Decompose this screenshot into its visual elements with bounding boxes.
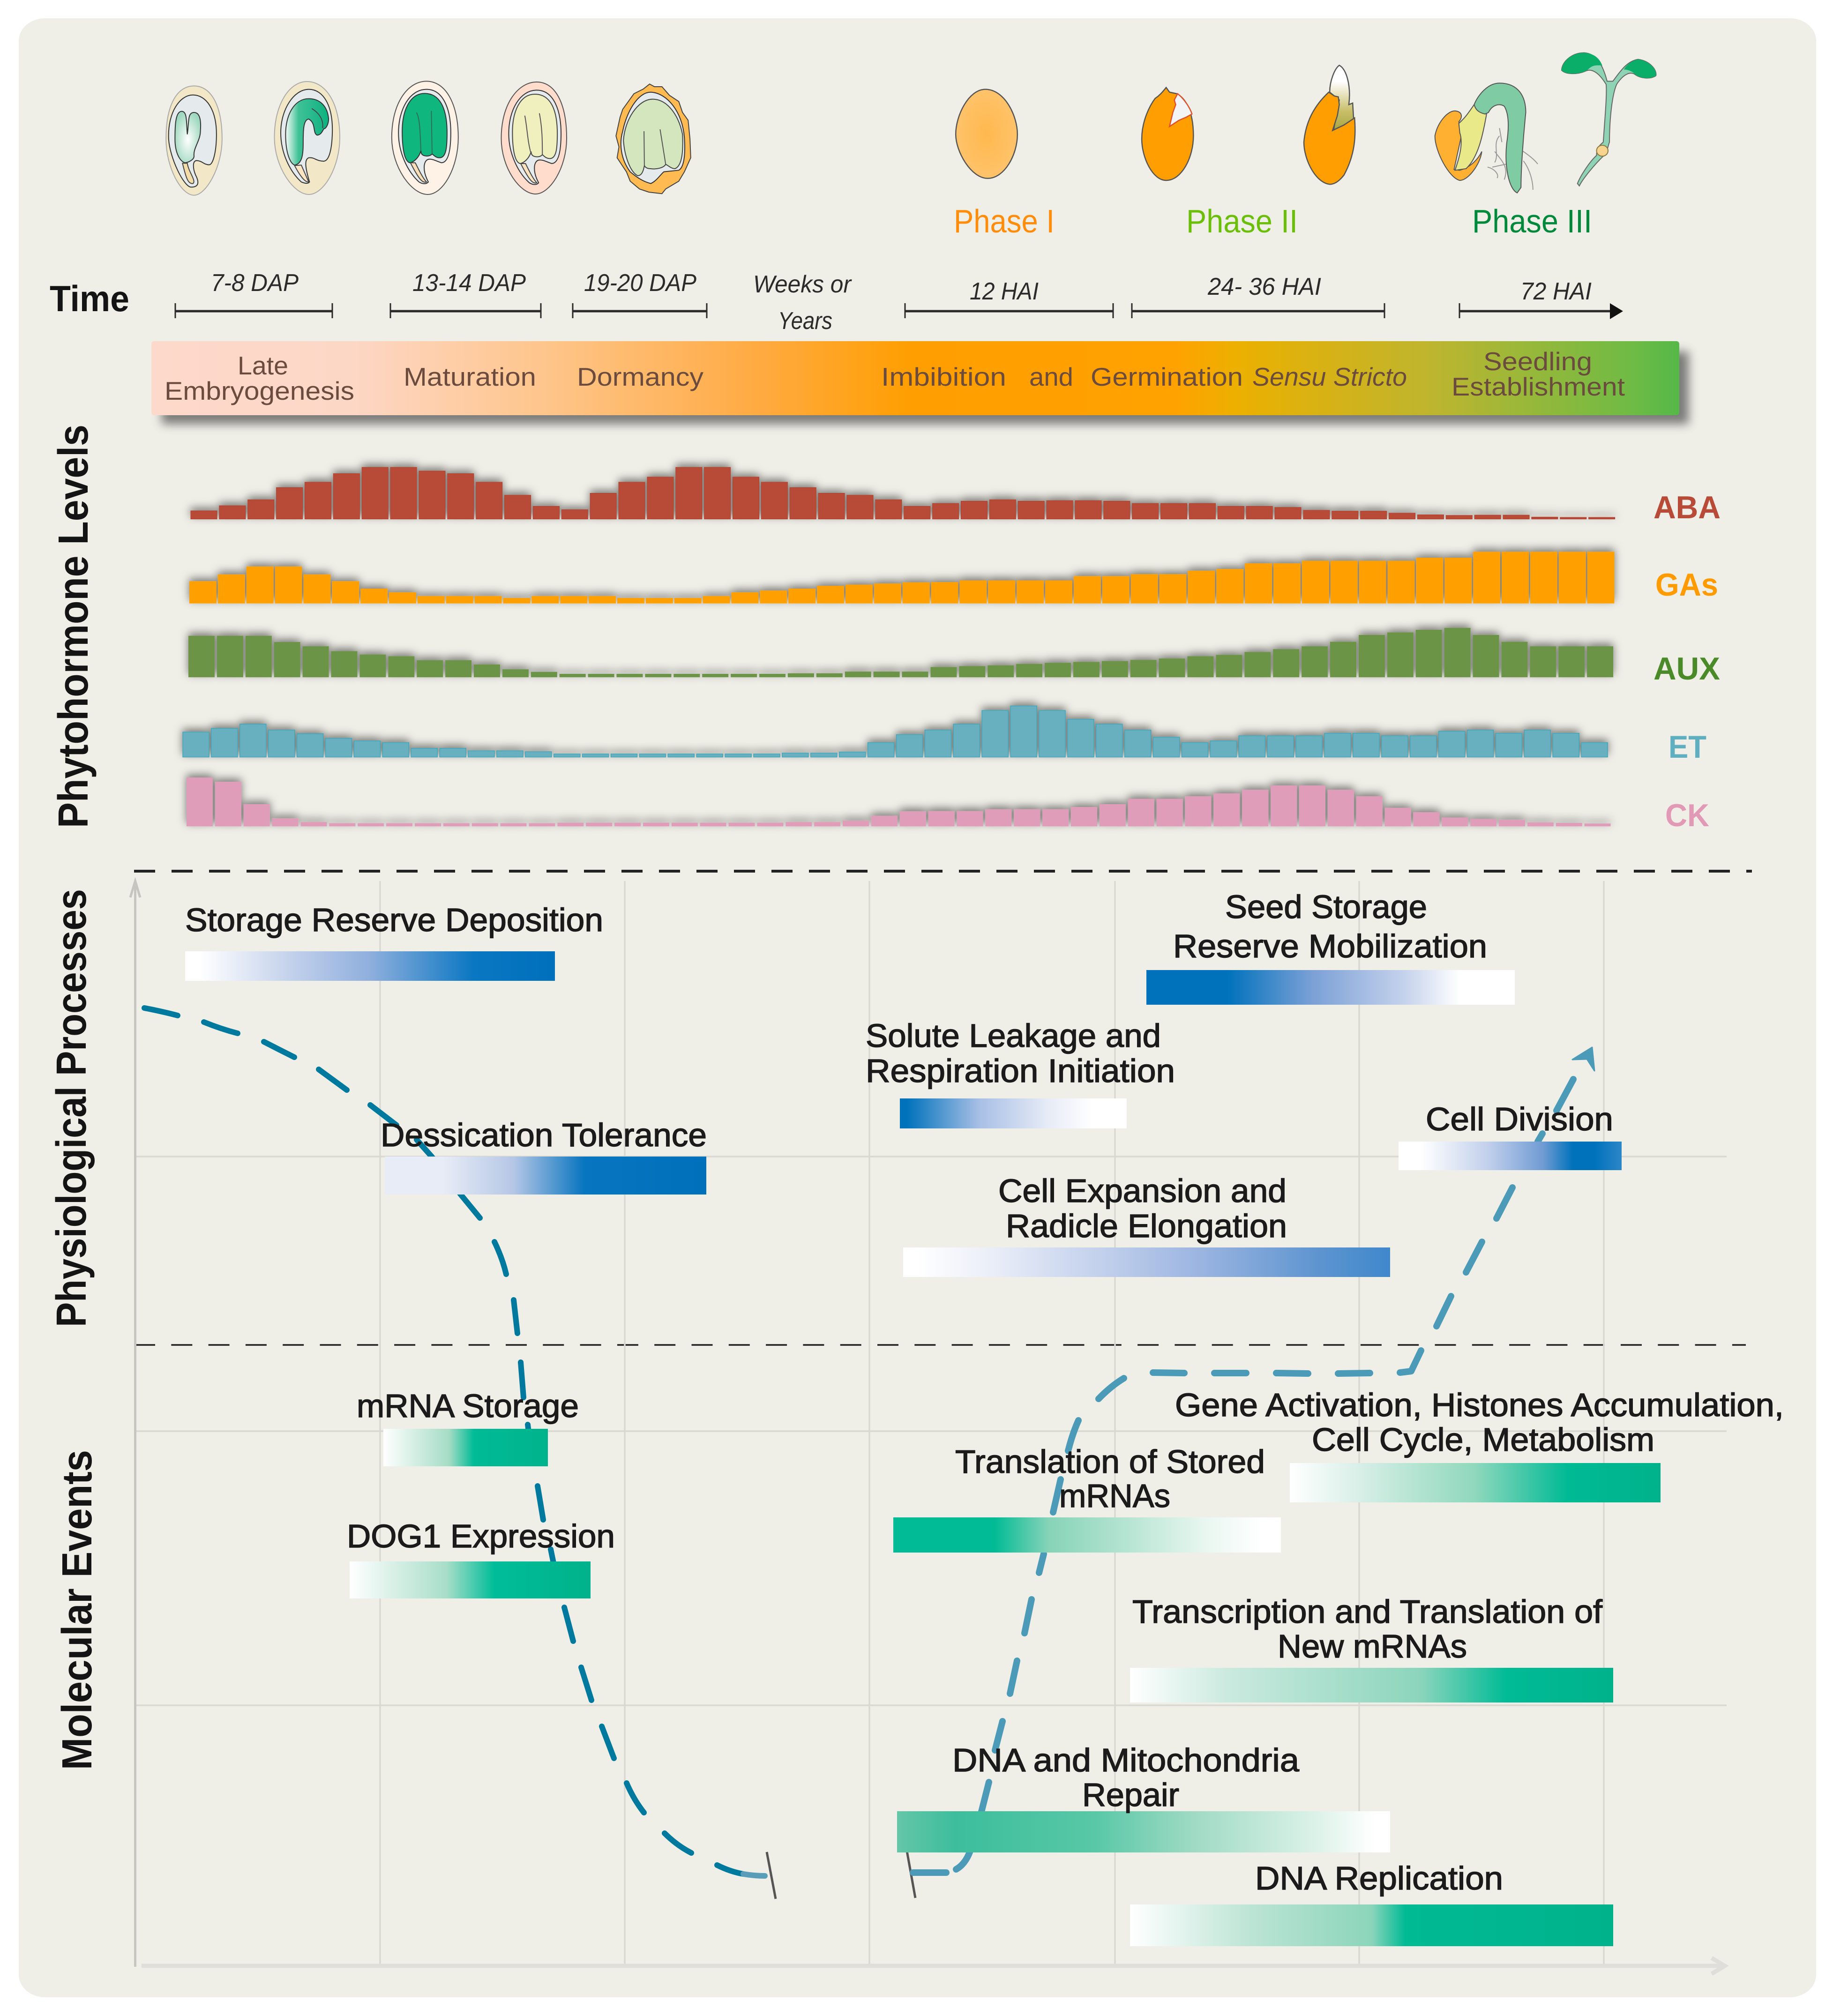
event: DNA Replication: DNA Replication	[1255, 1860, 1503, 1897]
event: DNA Replication	[1130, 1860, 1613, 1946]
icon: imbibed seed	[956, 90, 1018, 179]
time brackets	[175, 310, 1612, 312]
process: Cell Division	[1399, 1101, 1622, 1170]
curve: descending germination capacity	[144, 1008, 765, 1876]
icon: seed with emerging radicle	[1304, 65, 1355, 184]
stage labels	[165, 347, 1625, 405]
icon: seed late embryogenesis bent	[274, 82, 340, 194]
y axis arrow	[130, 881, 140, 1967]
heading: Physiological Processes: Physiological Processes	[48, 889, 95, 1327]
stage: Dormancy: Dormancy	[577, 362, 704, 391]
stage: Germination Sensu Stricto: Germination	[1091, 362, 1243, 391]
process: Seed Storage Reserve Mobilization: Seed Storage	[1225, 889, 1427, 925]
time label: 7-8 DAP: 7-8 DAP	[211, 269, 299, 297]
process: Dessication Tolerance: Dessication Tolerance	[381, 1117, 707, 1153]
bar chart: ABA	[191, 467, 1615, 519]
process: Storage Reserve Deposition	[185, 902, 603, 981]
bar chart: GAs	[189, 552, 1614, 604]
heading: Time: Time	[50, 278, 129, 319]
process: Dessication Tolerance	[381, 1117, 707, 1195]
time ranges	[175, 269, 1623, 335]
event: DNA and Mitochondria Repair	[897, 1742, 1390, 1852]
curve: ascending germination capacity	[913, 1047, 1594, 1873]
icon: seed dormancy	[501, 82, 567, 194]
legend label: ET: ET	[1668, 729, 1706, 765]
stage: Seedling Establishment: Seedling	[1483, 347, 1592, 376]
stage gradient bar	[151, 341, 1679, 415]
heading: Phytohormone Levels: Phytohormone Levels	[50, 425, 97, 828]
time label: 12 HAI: 12 HAI	[970, 278, 1039, 305]
process: Solute Leakage and Respiration Initiation: Solute Leakage and	[866, 1017, 1161, 1054]
stage bar shadow	[162, 351, 1689, 424]
legend label: CK: CK	[1665, 798, 1709, 833]
time label: 19-20 DAP: 19-20 DAP	[584, 269, 696, 297]
icon: seed late embryogenesis early	[166, 86, 222, 195]
label: Phase II: Phase II	[1186, 203, 1298, 239]
stage: and: and	[1029, 362, 1073, 391]
icon: germinated hook seedling	[1435, 83, 1538, 193]
arrowhead	[1572, 1047, 1594, 1071]
event: Translation of Stored mRNAs: Translation of Stored	[955, 1443, 1265, 1480]
process: Solute Leakage and Respiration Initiation: Respiration Initiation	[866, 1053, 1175, 1089]
event: DOG1 Expression: DOG1 Expression	[347, 1518, 615, 1554]
event: Transcription and Translation of New mRNAs	[1130, 1593, 1613, 1702]
time label: 72 HAI: 72 HAI	[1520, 278, 1592, 305]
arrow: open-ended time	[1610, 303, 1623, 319]
process: Seed Storage Reserve Mobilization	[1146, 889, 1515, 1005]
process: Storage Reserve Deposition: Storage Reserve Deposition	[185, 902, 603, 938]
stage: Late Embryogenesis: Embryogenesis	[165, 376, 354, 405]
process: Cell Expansion and Radicle Elongation	[903, 1172, 1390, 1277]
stage: Germination Sensu Stricto: Sensu Stricto	[1252, 362, 1407, 391]
axis break mark right	[907, 1851, 915, 1898]
bar chart: CK	[187, 777, 1611, 826]
process: Seed Storage Reserve Mobilization: Reserve Mobilization	[1173, 928, 1487, 964]
event: Translation of Stored mRNAs: mRNAs	[1059, 1478, 1170, 1514]
event: mRNA Storage: mRNA Storage	[357, 1388, 579, 1424]
icons: embryo development seeds	[166, 81, 691, 195]
stage: Maturation: Maturation	[404, 362, 536, 391]
event: Translation of Stored mRNAs	[893, 1443, 1281, 1553]
bar chart: AUX	[188, 628, 1613, 677]
stage: Imbibition: Imbibition	[881, 362, 1006, 391]
stage: Seedling Establishment	[1451, 347, 1625, 401]
time label: 13-14 DAP: 13-14 DAP	[412, 269, 526, 297]
stage: Late Embryogenesis: Late	[238, 351, 288, 380]
label: Phase III: Phase III	[1472, 203, 1592, 239]
stage: Germination Sensu Stricto	[1091, 362, 1407, 391]
event: Transcription and Translation of New mRNAs: Transcription and Translation of	[1132, 1593, 1603, 1630]
event: mRNA Storage	[357, 1388, 579, 1466]
process: Cell Division: Cell Division	[1426, 1101, 1613, 1137]
bracket ticks	[175, 303, 1459, 318]
icon: seed dry mature	[616, 84, 691, 194]
axes	[130, 881, 1725, 1974]
event: Gene Activation, Histones Accumulation, Cell Cycle, Metabolism: Gene Activation, Histones Accumulation,	[1175, 1387, 1784, 1423]
icon: seed maturation	[392, 81, 458, 194]
label: Phase I: Phase I	[954, 203, 1055, 239]
process: Solute Leakage and Respiration Initiation	[866, 1017, 1175, 1128]
time label: Weeks or Years: Weeks or	[753, 271, 853, 298]
stage: Seedling Establishment: Establishment	[1451, 372, 1625, 401]
event: DNA and Mitochondria Repair: DNA and Mitochondria	[952, 1742, 1299, 1778]
x axis arrow	[142, 1958, 1725, 1974]
legend label: AUX: AUX	[1653, 651, 1720, 687]
event: Gene Activation, Histones Accumulation, Cell Cycle, Metabolism: Cell Cycle, Metabolism	[1312, 1421, 1654, 1458]
event: DOG1 Expression	[347, 1518, 615, 1598]
icons: germination seeds	[956, 53, 1656, 193]
time label: Weeks or Years	[753, 271, 853, 335]
legend label: GAs: GAs	[1655, 567, 1718, 603]
icon: established seedling	[1562, 53, 1656, 186]
process: Cell Expansion and Radicle Elongation: Cell Expansion and	[998, 1172, 1287, 1209]
legend label: ABA: ABA	[1653, 490, 1721, 525]
process: Cell Expansion and Radicle Elongation: Radicle Elongation	[1006, 1208, 1287, 1244]
heading: Molecular Events: Molecular Events	[54, 1450, 101, 1770]
bar chart: ET	[183, 706, 1608, 757]
icon: seed with ruptured testa	[1142, 88, 1193, 180]
event: Transcription and Translation of New mRNAs: New mRNAs	[1278, 1628, 1467, 1665]
stage: Late Embryogenesis	[165, 351, 354, 405]
event: Gene Activation, Histones Accumulation, Cell Cycle, Metabolism	[1175, 1387, 1784, 1502]
axis break mark left	[767, 1852, 776, 1899]
event: DNA and Mitochondria Repair: Repair	[1082, 1777, 1179, 1813]
time label: 24-36 HAI: 24- 36 HAI	[1207, 273, 1321, 300]
time label: Weeks or Years: Years	[778, 307, 832, 335]
